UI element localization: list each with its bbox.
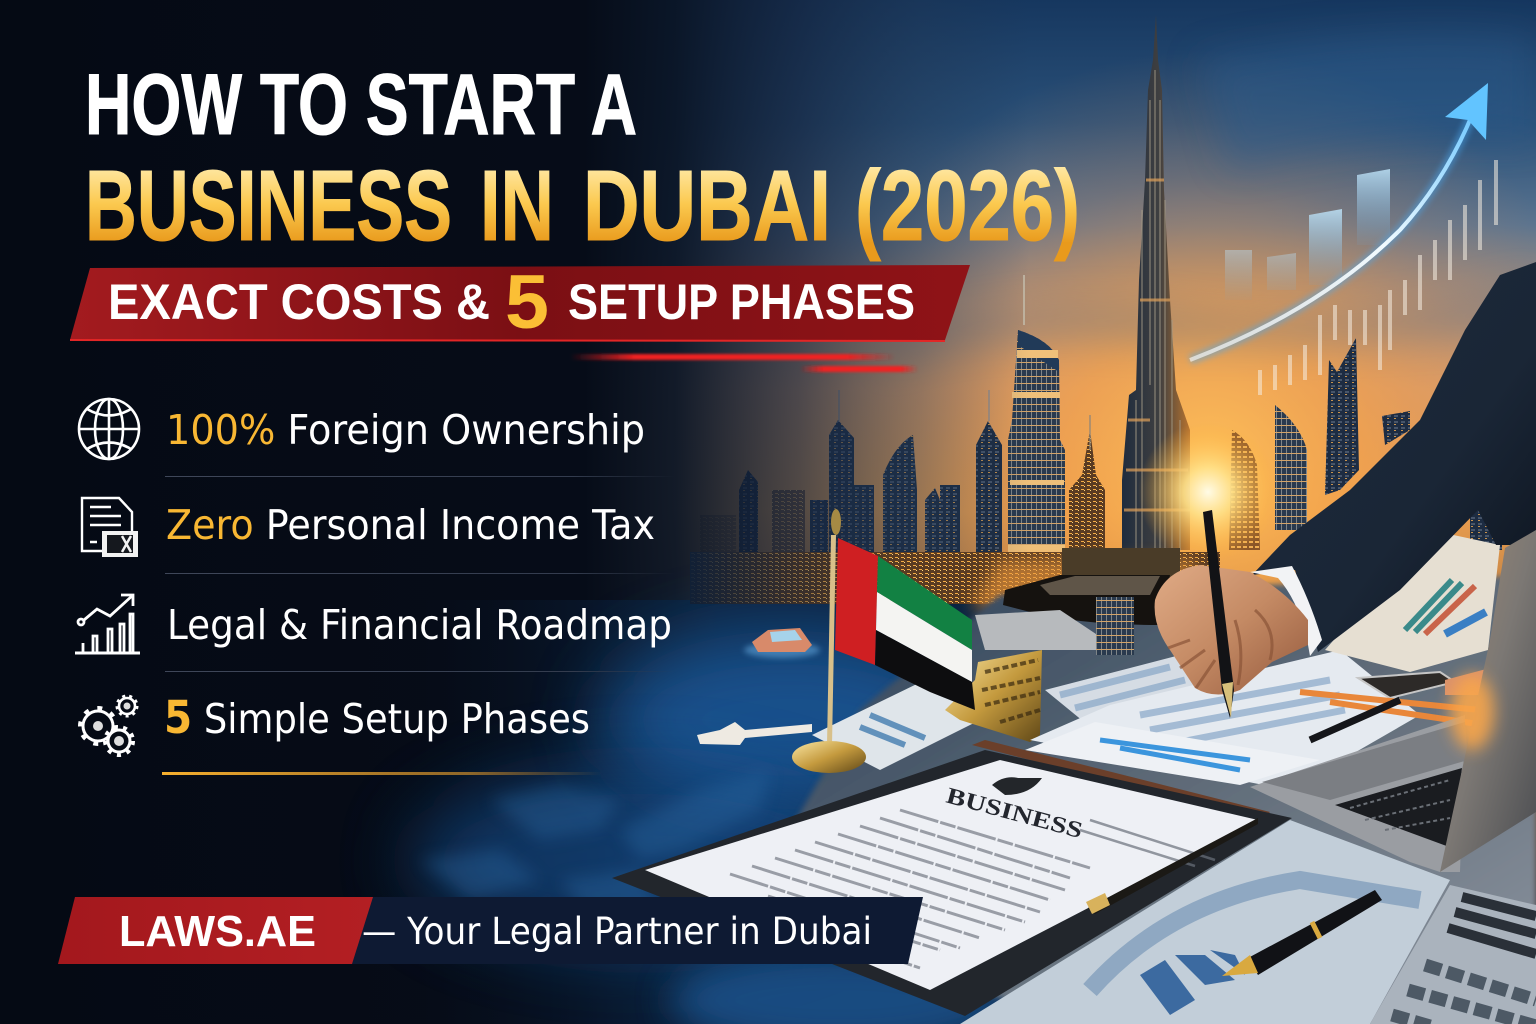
Burj Khalifa (1122, 15, 1190, 550)
small car (744, 628, 820, 658)
pointed tower spire (988, 390, 990, 421)
Burj lit bands (1124, 180, 1190, 510)
icon: gears (80, 696, 137, 755)
laptop (1250, 715, 1468, 872)
growth arrow glow (1190, 95, 1480, 360)
spire 1 (838, 390, 840, 422)
item: zero tax: Zero Personal Income Tax (166, 501, 655, 549)
calculator (1370, 885, 1536, 1024)
gold divider (162, 772, 602, 775)
icon: globe (79, 399, 139, 459)
shirt cuff (1250, 566, 1322, 656)
lower map sheet (960, 820, 1450, 1024)
title (85, 57, 1080, 262)
far-right tower (1325, 338, 1359, 495)
red stripe (835, 538, 878, 665)
paper text lines (730, 810, 1090, 968)
title line 2: IN (480, 150, 554, 262)
curved tower 2 (883, 435, 917, 555)
phone and orange pens (1300, 668, 1490, 740)
arrow head (1445, 83, 1488, 140)
Burj facade lines (1136, 70, 1180, 550)
chart ribbons (1405, 580, 1462, 632)
banner text right: SETUP PHASES (568, 274, 915, 330)
stepped tower (1069, 430, 1105, 552)
divider (165, 476, 675, 477)
footer strip (58, 897, 923, 964)
pointed tower (976, 421, 1002, 555)
red accent lines (570, 354, 918, 372)
distant tower behind sheet (1470, 505, 1502, 550)
dark band (340, 897, 923, 964)
item: setup phases: 5 Simple Setup Phases (164, 691, 590, 744)
waterfront city lights (690, 552, 1220, 620)
document chart lines (860, 715, 925, 745)
item: foreign ownership: 100% Foreign Ownership (166, 406, 645, 454)
white stripe (876, 592, 972, 682)
flag base (792, 741, 866, 773)
green stripe (877, 556, 972, 650)
candlesticks (1260, 160, 1496, 395)
right tower (1275, 405, 1307, 530)
black pen (1222, 890, 1382, 976)
icon: growth chart (75, 595, 140, 653)
red brand tag (58, 897, 373, 964)
tall central tower (1008, 330, 1065, 556)
paper (645, 760, 1258, 990)
water and world map floor (410, 600, 1420, 1024)
title line 2: DUBAI (583, 150, 831, 262)
laptop lid (1440, 530, 1536, 872)
title line 2: (2026) (855, 150, 1080, 262)
brand name: LAWS.AE (119, 907, 316, 956)
black stripe (875, 630, 975, 710)
pole finial (831, 509, 841, 535)
blue paper chart (1100, 740, 1250, 770)
suit sleeve (1250, 262, 1536, 656)
banner edge (70, 340, 945, 341)
tall tower spire (1023, 275, 1025, 325)
stepped tower spire (1089, 415, 1091, 450)
blue map bars (1140, 950, 1245, 1015)
document beside flag (812, 680, 990, 770)
ruler strip (972, 740, 1270, 820)
flag pole (827, 535, 836, 745)
benefits list (75, 399, 675, 775)
small far-right tower (1382, 411, 1410, 445)
white ribbon (697, 722, 812, 745)
clipboard with business document (612, 750, 1292, 1016)
icon: tax document (82, 498, 138, 557)
title line 1: HOW TO START A (85, 57, 637, 153)
gold-trim pen on clipboard (1088, 818, 1258, 914)
banner number: 5 (505, 260, 549, 345)
banner ribbon (70, 265, 970, 340)
item: roadmap: Legal & Financial Roadmap (167, 601, 672, 649)
divider (165, 573, 675, 574)
desk phone and objects (975, 548, 1180, 655)
tagline: — Your Legal Partner in Dubai (362, 910, 872, 953)
hand holding pen (1155, 510, 1308, 718)
far-left towers (700, 470, 960, 575)
skyline of Dubai (700, 15, 1410, 575)
BUSINESS heading: BUSINESS (944, 783, 1085, 843)
orange tower (1229, 430, 1260, 550)
gold coin stack (945, 650, 1042, 742)
rising growth chart (1190, 83, 1496, 395)
right chart sheet (1325, 530, 1500, 672)
divider (165, 671, 675, 672)
growth arrow (1190, 100, 1478, 360)
subtitle banner (70, 260, 970, 345)
desk papers (1025, 505, 1502, 790)
UAE flag on stand (792, 509, 975, 773)
pen in hand (1203, 510, 1234, 718)
sun glare (1138, 422, 1278, 562)
banner text left: EXACT COSTS & (108, 274, 490, 330)
title line 2 (85, 150, 1080, 262)
glass bars (1225, 169, 1390, 300)
paper logo (992, 777, 1042, 795)
title line 2: BUSINESS (85, 150, 452, 262)
curved tower 1 (829, 420, 854, 560)
desk (790, 575, 1536, 1024)
